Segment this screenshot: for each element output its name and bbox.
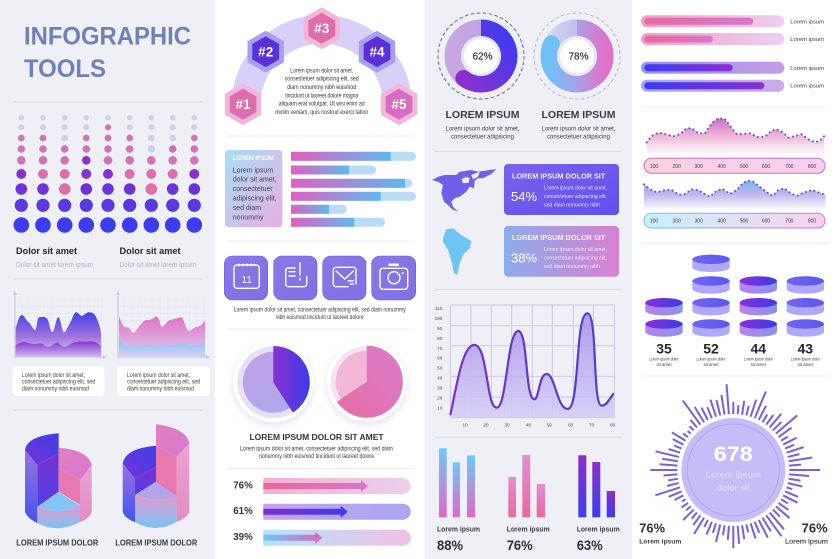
- dot chart captions: Dolor sit amet lorem ipsum: [120, 262, 197, 269]
- bar group 63%: 63%: [577, 538, 603, 553]
- arc description text: Lorem ipsum dolor sit amet,: [290, 67, 353, 74]
- line chart: 20: [483, 422, 489, 428]
- icon: note with exclamation: [274, 256, 317, 300]
- scale pill blue: [644, 213, 825, 228]
- icons description: nibh euismod tincidunt ut laoreet dolore: [276, 314, 364, 321]
- hexagon 1: #1: [235, 97, 251, 112]
- progress pill 2: [641, 33, 824, 45]
- line chart: 30: [437, 386, 443, 390]
- map: South America: [443, 228, 471, 275]
- disc stack 35: [645, 298, 683, 367]
- disc stack 52: 52: [703, 340, 719, 356]
- donut caption 2: LOREM IPSUM: [542, 109, 616, 121]
- bar group 88%: 88%: [437, 538, 463, 553]
- bar group 76%: 76%: [507, 538, 533, 553]
- disc stack 35: 35: [656, 340, 672, 356]
- scale pill blue: 700: [785, 219, 794, 225]
- scale pill pink: 800: [808, 164, 816, 170]
- line chart: 20: [437, 395, 443, 400]
- icon: calendar: [224, 256, 268, 300]
- dot chart captions: [16, 246, 197, 269]
- 3D cylinder chart 1: [25, 433, 92, 528]
- donut chart 78%: [534, 13, 620, 99]
- line chart: 50: [437, 366, 443, 371]
- arc description text: diam nonummy nibh euismod: [287, 84, 357, 91]
- area chart: pink and blue: [116, 291, 210, 359]
- map: North America: [432, 169, 496, 212]
- disc stack 52: [692, 255, 730, 367]
- area chart: blue and purple: [13, 291, 107, 359]
- arc description text: tincidunt ut laoreet dolore magna: [285, 92, 359, 99]
- disc stack 52: Lorem ipsum dolor: [696, 357, 726, 362]
- progress pill 3: [641, 62, 824, 74]
- horizontal bar chart: [291, 152, 416, 227]
- 3D cylinder chart 2: [123, 424, 189, 528]
- dotted area chart blue: [644, 181, 826, 210]
- dot chart captions: Dolor sit amet: [16, 246, 78, 257]
- text box under chart 2: [117, 366, 210, 396]
- disc stack 44: sit amet: [751, 362, 767, 367]
- cylinder chart captions: [16, 538, 197, 548]
- line chart: 10: [437, 405, 443, 410]
- scale pill blue: 200: [673, 219, 681, 225]
- info card 38%: sed diam nonummy nibh: [544, 264, 600, 270]
- gradient text card: dolor sit amet,: [233, 177, 277, 184]
- panel: right column: [632, 0, 840, 559]
- gradient text card: consectetuer: [233, 186, 273, 193]
- pie heading and text: LOREM IPSUM DOLOR SIT AMET: [250, 432, 384, 442]
- scale pill pink: 600: [762, 164, 770, 170]
- semicircle band: [232, 15, 412, 105]
- panel: second column: [215, 0, 424, 559]
- panel: third column: [424, 0, 632, 559]
- donut caption 1: [446, 109, 520, 140]
- arc description text: [275, 67, 369, 116]
- disc stack 44: 44: [751, 340, 766, 356]
- cylinder chart captions: LOREM IPSUM DOLOR: [16, 538, 98, 548]
- radial burst chart: dolor sit: [717, 483, 751, 493]
- cylinder chart captions: LOREM IPSUM DOLOR: [115, 538, 197, 548]
- progress arrow 39%: [233, 530, 411, 546]
- info card 54%: 54%: [511, 189, 537, 204]
- info card 38%: consectetuer adipiscing elit,: [544, 256, 607, 262]
- gradient text card: Lorem ipsum: [233, 167, 273, 174]
- donut chart 78%: 78%: [568, 52, 589, 63]
- gradient text card: nonummy: [233, 214, 264, 221]
- text box under chart 2: Lorem ipsum dolor sit amet,: [127, 372, 190, 379]
- text box under chart 1: diam nonummy nibh euismod: [22, 386, 89, 392]
- donut caption 2: [542, 109, 616, 140]
- dotted area chart pink: [647, 118, 824, 155]
- gradient text card: sed diam: [233, 205, 261, 212]
- progress pill 1: Lorem ipsum: [790, 19, 824, 25]
- progress arrow 39%: 39%: [233, 532, 253, 543]
- disc stack 35: Lorem ipsum dolor: [650, 357, 679, 362]
- arc description text: consectetuer adipiscing elit, sed: [285, 76, 359, 83]
- progress arrow 61%: 61%: [233, 506, 253, 517]
- pie heading and text: nonummy nibh euismod tincidunt ut laoreet dolore: [259, 453, 374, 460]
- progress arrow 61%: [233, 504, 411, 520]
- disc stack 52: sit amet: [703, 362, 719, 367]
- line chart: 80: [437, 336, 443, 341]
- scale pill blue: 600: [762, 219, 770, 225]
- disc stack 43: 43: [798, 340, 813, 356]
- icons description: [234, 306, 406, 321]
- scale pill pink: 500: [740, 164, 748, 170]
- line chart: 80: [610, 422, 616, 428]
- progress pill 3: Lorem ipsum: [790, 66, 824, 72]
- progress pill 4: Lorem ipsum: [790, 84, 824, 90]
- line chart: 60: [568, 422, 574, 428]
- dot chart captions: Dolor sit amet: [120, 246, 181, 257]
- bar group 76%: [507, 455, 550, 553]
- radial burst chart: Lorem ipsum: [706, 470, 761, 480]
- donut caption 2: consectetuer adipiscing: [547, 133, 610, 140]
- disc stack 43: Lorem ipsum dolor: [791, 357, 820, 362]
- arc description text: aliquam erat volutpat. Ut wisi enim ad: [279, 101, 365, 108]
- stat bottom left: Lorem ipsum: [639, 538, 682, 545]
- pie heading and text: Lorem ipsum dolor sit amet, consectetuer adipiscing elit, sed diam: [240, 445, 393, 452]
- info card 38%: 38%: [511, 250, 537, 266]
- panel: left column: [0, 0, 215, 559]
- text box under chart 2: consectetuer adipiscing elit, sed: [127, 379, 200, 386]
- arc description text: minim veniam, quis nostrud exerci tation: [275, 109, 369, 116]
- line chart: 50: [547, 422, 552, 428]
- donut caption 1: consectetuer adipiscing: [451, 133, 514, 140]
- hexagon 4: #4: [369, 45, 385, 60]
- scale pill pink: 400: [718, 164, 726, 170]
- text box under chart 1: Lorem ipsum dolor sit amet,: [22, 372, 85, 379]
- text box under chart 1: [13, 366, 104, 396]
- scale pill blue: 100: [650, 219, 658, 225]
- line chart: 40: [526, 422, 531, 428]
- scale pill pink: 200: [673, 164, 681, 170]
- disc stack 43: sit amet: [798, 362, 814, 367]
- line chart: 110: [435, 306, 443, 311]
- title: TOOLS: [24, 55, 106, 83]
- gradient text card: adipiscing elit,: [233, 195, 277, 202]
- donut caption 1: Lorem ipsum dolor sit amet,: [446, 125, 520, 132]
- stat bottom right: Lorem ipsum: [785, 538, 828, 545]
- hexagon 2: [248, 31, 284, 73]
- dot chart captions: Dolor sit amet lorem ipsum: [16, 262, 93, 269]
- progress pill 1: [641, 15, 824, 27]
- info card 38%: Lorem ipsum dolor sit amet,: [544, 247, 607, 253]
- scale pill blue: 800: [808, 219, 816, 225]
- bar group 63%: [577, 455, 620, 553]
- donut caption 1: LOREM IPSUM: [446, 109, 520, 121]
- line chart: 90: [437, 326, 443, 331]
- info card 38%: [504, 226, 619, 277]
- hexagon 4: [359, 31, 395, 73]
- scale pill pink: 300: [695, 164, 703, 170]
- line chart: 60: [437, 356, 443, 361]
- hexagon 5: #5: [391, 97, 407, 112]
- line chart: 70: [589, 422, 595, 428]
- line chart: [435, 305, 616, 428]
- bar group 63%: Lorem ipsum: [577, 525, 620, 534]
- info card 54%: Lorem ipsum dolor sit amet,: [544, 186, 607, 192]
- hexagon 5: [381, 83, 417, 125]
- pie chart purple: [233, 342, 313, 422]
- donut chart 62%: [438, 13, 524, 99]
- bar group 76%: Lorem ipsum: [507, 525, 550, 534]
- radial burst chart: 678: [714, 443, 753, 466]
- radial burst chart: [650, 384, 820, 548]
- icon: camera: [372, 256, 416, 300]
- stat bottom right: [785, 521, 828, 545]
- donut caption 2: Lorem ipsum dolor sit amet,: [542, 125, 616, 132]
- text box under chart 2: diam nonummy nibh euismod: [127, 386, 194, 392]
- disc stack 44: [740, 276, 777, 367]
- disc stack 44: Lorem ipsum dolor: [744, 357, 773, 362]
- pie chart pink: [327, 342, 407, 422]
- hexagon 2: #2: [258, 45, 273, 60]
- hexagon 3: [304, 7, 340, 49]
- dot matrix chart: [13, 115, 202, 233]
- line chart: 30: [504, 422, 510, 428]
- hexagon 3: #3: [314, 21, 330, 36]
- info card 38%: LOREM IPSUM DOLOR SIT: [512, 233, 606, 242]
- stat bottom left: [639, 521, 682, 545]
- scale pill pink: 700: [785, 164, 794, 170]
- line chart: 10: [462, 422, 468, 428]
- text box under chart 1: consectetuer adipiscing elit, sed: [22, 379, 95, 386]
- gradient text card: [225, 150, 282, 227]
- progress arrow 76%: [233, 478, 411, 494]
- line chart: 40: [437, 376, 443, 380]
- title: [24, 22, 191, 83]
- hexagon 1: [225, 83, 261, 125]
- bar group 88%: Lorem ipsum: [437, 525, 480, 534]
- progress arrow 76%: 76%: [233, 480, 253, 492]
- progress pill 4: [641, 80, 824, 92]
- scale pill pink: 100: [650, 164, 658, 170]
- title: INFOGRAPHIC: [24, 22, 191, 50]
- scale pill pink: [644, 158, 825, 173]
- line chart: 70: [437, 346, 443, 351]
- scale pill blue: 400: [718, 219, 726, 225]
- info card 54%: sed diam nonummy nibh: [544, 202, 600, 208]
- icon: envelope: [323, 256, 366, 300]
- icons description: Lorem ipsum dolor sit amet, consectetuer adipiscing elit, sed diam nonummy: [234, 306, 406, 313]
- line chart: 100: [435, 316, 443, 321]
- gradient text card: LOREM IPSUM: [233, 156, 274, 162]
- icon: calendar: 11: [242, 275, 252, 286]
- disc stack 35: sit amet: [656, 362, 672, 367]
- info card 54%: [504, 164, 619, 215]
- pie heading and text: [240, 432, 393, 460]
- stat bottom right: 76%: [802, 521, 828, 535]
- stat bottom left: 76%: [639, 521, 665, 535]
- disc stack 43: [787, 276, 824, 367]
- info card 54%: consectetuer adipiscing elit,: [544, 194, 607, 200]
- info card 54%: LOREM IPSUM DOLOR SIT: [512, 171, 606, 180]
- donut chart 62%: 62%: [472, 52, 493, 63]
- progress pill 2: Lorem ipsum: [790, 37, 824, 43]
- bar group 88%: [437, 448, 480, 553]
- scale pill blue: 500: [740, 219, 748, 225]
- scale pill blue: 300: [695, 219, 703, 225]
